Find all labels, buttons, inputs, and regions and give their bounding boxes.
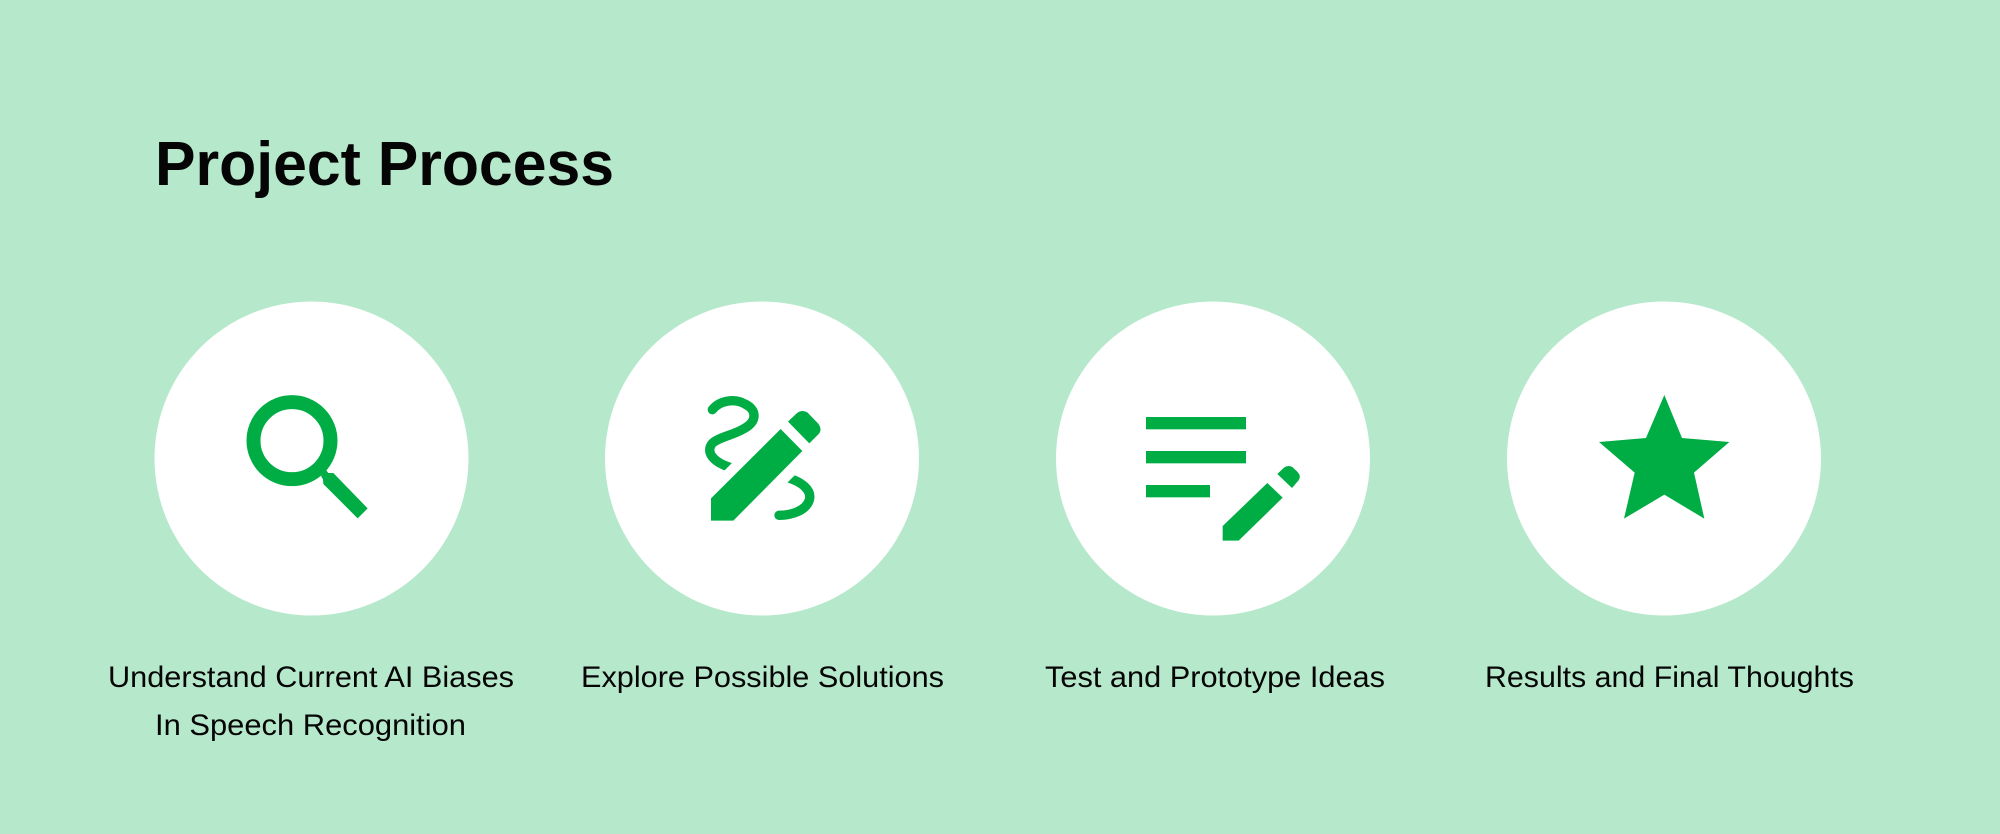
icon: star — [1599, 395, 1729, 519]
icon: pencil and squiggle — [708, 401, 821, 521]
step 3: test and prototype — [1045, 302, 1385, 694]
label: Understand Current AI Biases — [108, 661, 514, 694]
label: Results and Final Thoughts — [1485, 661, 1854, 694]
circle — [1056, 302, 1370, 616]
label: In Speech Recognition — [155, 709, 466, 742]
circle — [154, 302, 468, 616]
title: Project Process — [155, 130, 614, 199]
icon: magnifying glass — [253, 402, 368, 518]
step 2: explore solutions — [581, 302, 944, 694]
label: Explore Possible Solutions — [581, 661, 944, 694]
icon: text lines and pencil — [1146, 417, 1300, 541]
step 4: results — [1485, 302, 1854, 694]
circle — [605, 302, 919, 616]
label — [108, 661, 514, 742]
label: Test and Prototype Ideas — [1045, 661, 1385, 694]
circle — [1507, 302, 1821, 616]
step 1: understand biases — [108, 302, 514, 742]
